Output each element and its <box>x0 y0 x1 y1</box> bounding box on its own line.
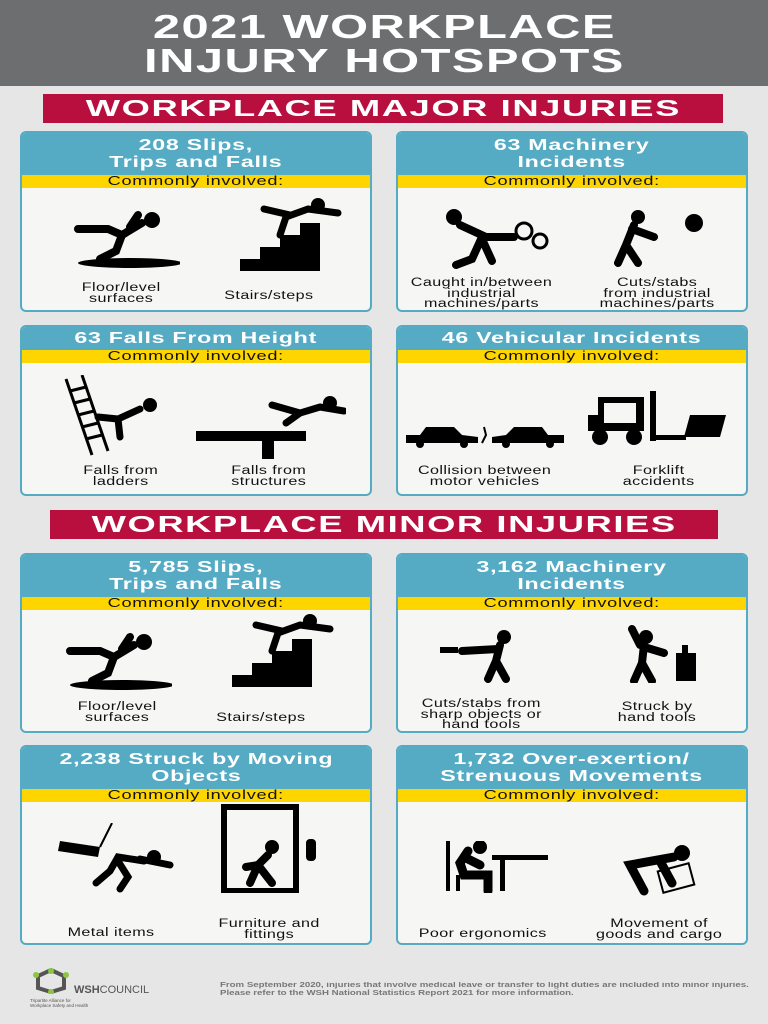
icon: car collision <box>406 426 564 448</box>
label: collision: motor vehicles <box>430 476 540 488</box>
label: caught in/between: machines/parts <box>424 298 540 310</box>
panel: 1732 over-exertion: Strenuous Movements <box>441 768 703 785</box>
panel: 1732 over-exertion: 1,732 Over-exertion/ <box>454 751 690 768</box>
label: caught in/between <box>411 277 553 310</box>
label: metal items: Metal items <box>68 927 154 939</box>
panel: 5785 slips <box>20 553 372 733</box>
label: cuts/stabs machines: Cuts/stabs <box>617 277 697 289</box>
label: caught in/between: industrial <box>448 288 516 300</box>
label: floor/level <box>78 701 156 724</box>
icon: forklift <box>588 391 726 445</box>
label: movement of goods: goods and cargo <box>596 928 722 940</box>
panel: 208 slips trips falls: Trips and Falls <box>109 154 283 171</box>
label: floor/level surfaces <box>82 282 160 304</box>
icon: stairs <box>232 614 334 687</box>
icon: ladder fall <box>64 375 157 456</box>
label: movement of goods: Movement of <box>610 918 708 930</box>
label: cuts/stabs machines: from industrial <box>603 288 711 300</box>
panel: 46 vehicular <box>396 325 748 496</box>
label: struck by hand tools: Struck by <box>622 701 692 713</box>
icon: slip on floor <box>74 211 180 268</box>
panel: 2238 struck: 2,238 Struck by Moving <box>59 751 333 768</box>
label: cuts/stabs sharp <box>420 698 542 731</box>
label: floor/level: surfaces <box>85 712 149 724</box>
panel: 46 vehicular: Commonly involved: <box>484 349 660 363</box>
footnote: From September 2020, injuries that involve medical leave or transfer to light duties are included into minor injuries. <box>220 982 749 989</box>
panel: 63 machinery: 63 Machinery <box>494 137 650 154</box>
panel: 3162 machinery: Commonly involved: <box>484 596 660 610</box>
label: floor/level surfaces: Floor/level <box>82 282 160 294</box>
footnote: Please refer to the WSH National Statistics Report 2021 for more information. <box>220 990 574 997</box>
label: poor ergonomics: Poor ergonomics <box>419 928 547 940</box>
banner: minor injuries: WORKPLACE MINOR INJURIES <box>91 511 677 537</box>
label: forklift <box>623 465 695 488</box>
panel: 208 slips trips falls: 208 Slips, <box>139 137 253 154</box>
panel: 63 falls from height: 63 Falls From Height <box>75 330 317 347</box>
label: furniture <box>218 918 320 940</box>
panel: 63 falls from height: Commonly involved: <box>108 349 284 363</box>
icon: metal items <box>58 823 174 892</box>
label: falls from structures <box>232 465 306 488</box>
label: cuts/stabs machines: machines/parts <box>599 298 715 310</box>
label: falls from ladders <box>84 465 158 488</box>
panel: 1732 over-exertion <box>396 745 748 945</box>
label: stairs/steps: Stairs/steps <box>216 712 306 724</box>
banner: major injuries: WORKPLACE MAJOR INJURIES <box>85 95 681 121</box>
panel: 2238 struck: Commonly involved: <box>108 788 284 802</box>
logo: WSH council <box>30 968 149 1008</box>
title <box>0 0 768 86</box>
title: INJURY HOTSPOTS <box>144 42 624 79</box>
label: falls from ladders: ladders <box>93 476 149 488</box>
label: cuts/stabs sharp: sharp objects or <box>420 708 542 720</box>
panel: 3162 machinery: Incidents <box>518 576 626 593</box>
icon: slip on floor <box>66 633 172 690</box>
logo: WSH council: Tripartite Alliance for <box>30 998 71 1003</box>
icon: cuts/stabs <box>614 210 703 267</box>
icon: structure fall <box>196 396 346 459</box>
panel: 3162 machinery: 3,162 Machinery <box>477 559 667 576</box>
label: struck by hand tools <box>618 701 696 724</box>
label: struck by hand tools: hand tools <box>618 712 696 724</box>
label: forklift: Forklift <box>633 465 685 477</box>
label: forklift: accidents <box>623 476 695 488</box>
panel: 5785 slips: 5,785 Slips, <box>128 559 264 576</box>
panel: 208 slips trips falls: Commonly involved: <box>108 174 284 188</box>
panel: 63 machinery: Incidents <box>518 154 626 171</box>
panel: 2238 struck: Objects <box>151 768 241 785</box>
label: collision <box>418 465 552 488</box>
label: furniture: Furniture and <box>218 918 320 930</box>
label: cuts/stabs sharp: Cuts/stabs from <box>421 698 541 710</box>
panel: 208 slips trips falls <box>20 131 372 312</box>
panel: 5785 slips: Trips and Falls <box>109 576 283 593</box>
label: floor/level surfaces: surfaces <box>89 292 153 304</box>
panel: 2238 struck <box>20 745 372 945</box>
label: stairs/steps: Stairs/steps <box>224 290 314 302</box>
label: collision: Collision between <box>418 465 552 477</box>
logo: WSH council: Workplace Safety and Health <box>30 1003 88 1008</box>
icon: furniture <box>221 804 316 893</box>
icon: poor ergonomics <box>446 841 548 893</box>
icon: struck by hand tools <box>628 625 696 683</box>
footnote <box>220 982 749 997</box>
logo: WSH council: WSHCOUNCIL <box>74 984 149 996</box>
panel: 1732 over-exertion: Commonly involved: <box>484 788 660 802</box>
label: floor/level: Floor/level <box>78 701 156 713</box>
panel: 46 vehicular: 46 Vehicular Incidents <box>442 330 702 347</box>
label: falls from ladders: Falls from <box>84 465 158 477</box>
icon: sharp objects <box>440 630 511 683</box>
panel: 3162 machinery <box>396 553 748 733</box>
label: falls from structures: Falls from <box>232 465 306 477</box>
label: movement of goods <box>596 918 722 940</box>
panel: 63 machinery <box>396 131 748 312</box>
title: 2021 WORKPLACE <box>152 8 616 45</box>
icon: caught in machine <box>446 209 548 269</box>
panel: 63 falls from height <box>20 325 372 496</box>
label: cuts/stabs machines <box>599 277 715 310</box>
panel: 5785 slips: Commonly involved: <box>108 596 284 610</box>
icon: stairs <box>240 198 342 271</box>
label: falls from structures: structures <box>232 476 306 488</box>
panel: 63 machinery: Commonly involved: <box>484 174 660 188</box>
label: caught in/between: Caught in/between <box>411 277 553 289</box>
icon: moving goods <box>623 845 696 896</box>
label: furniture: fittings <box>244 928 294 940</box>
label: cuts/stabs sharp: hand tools <box>442 719 520 731</box>
